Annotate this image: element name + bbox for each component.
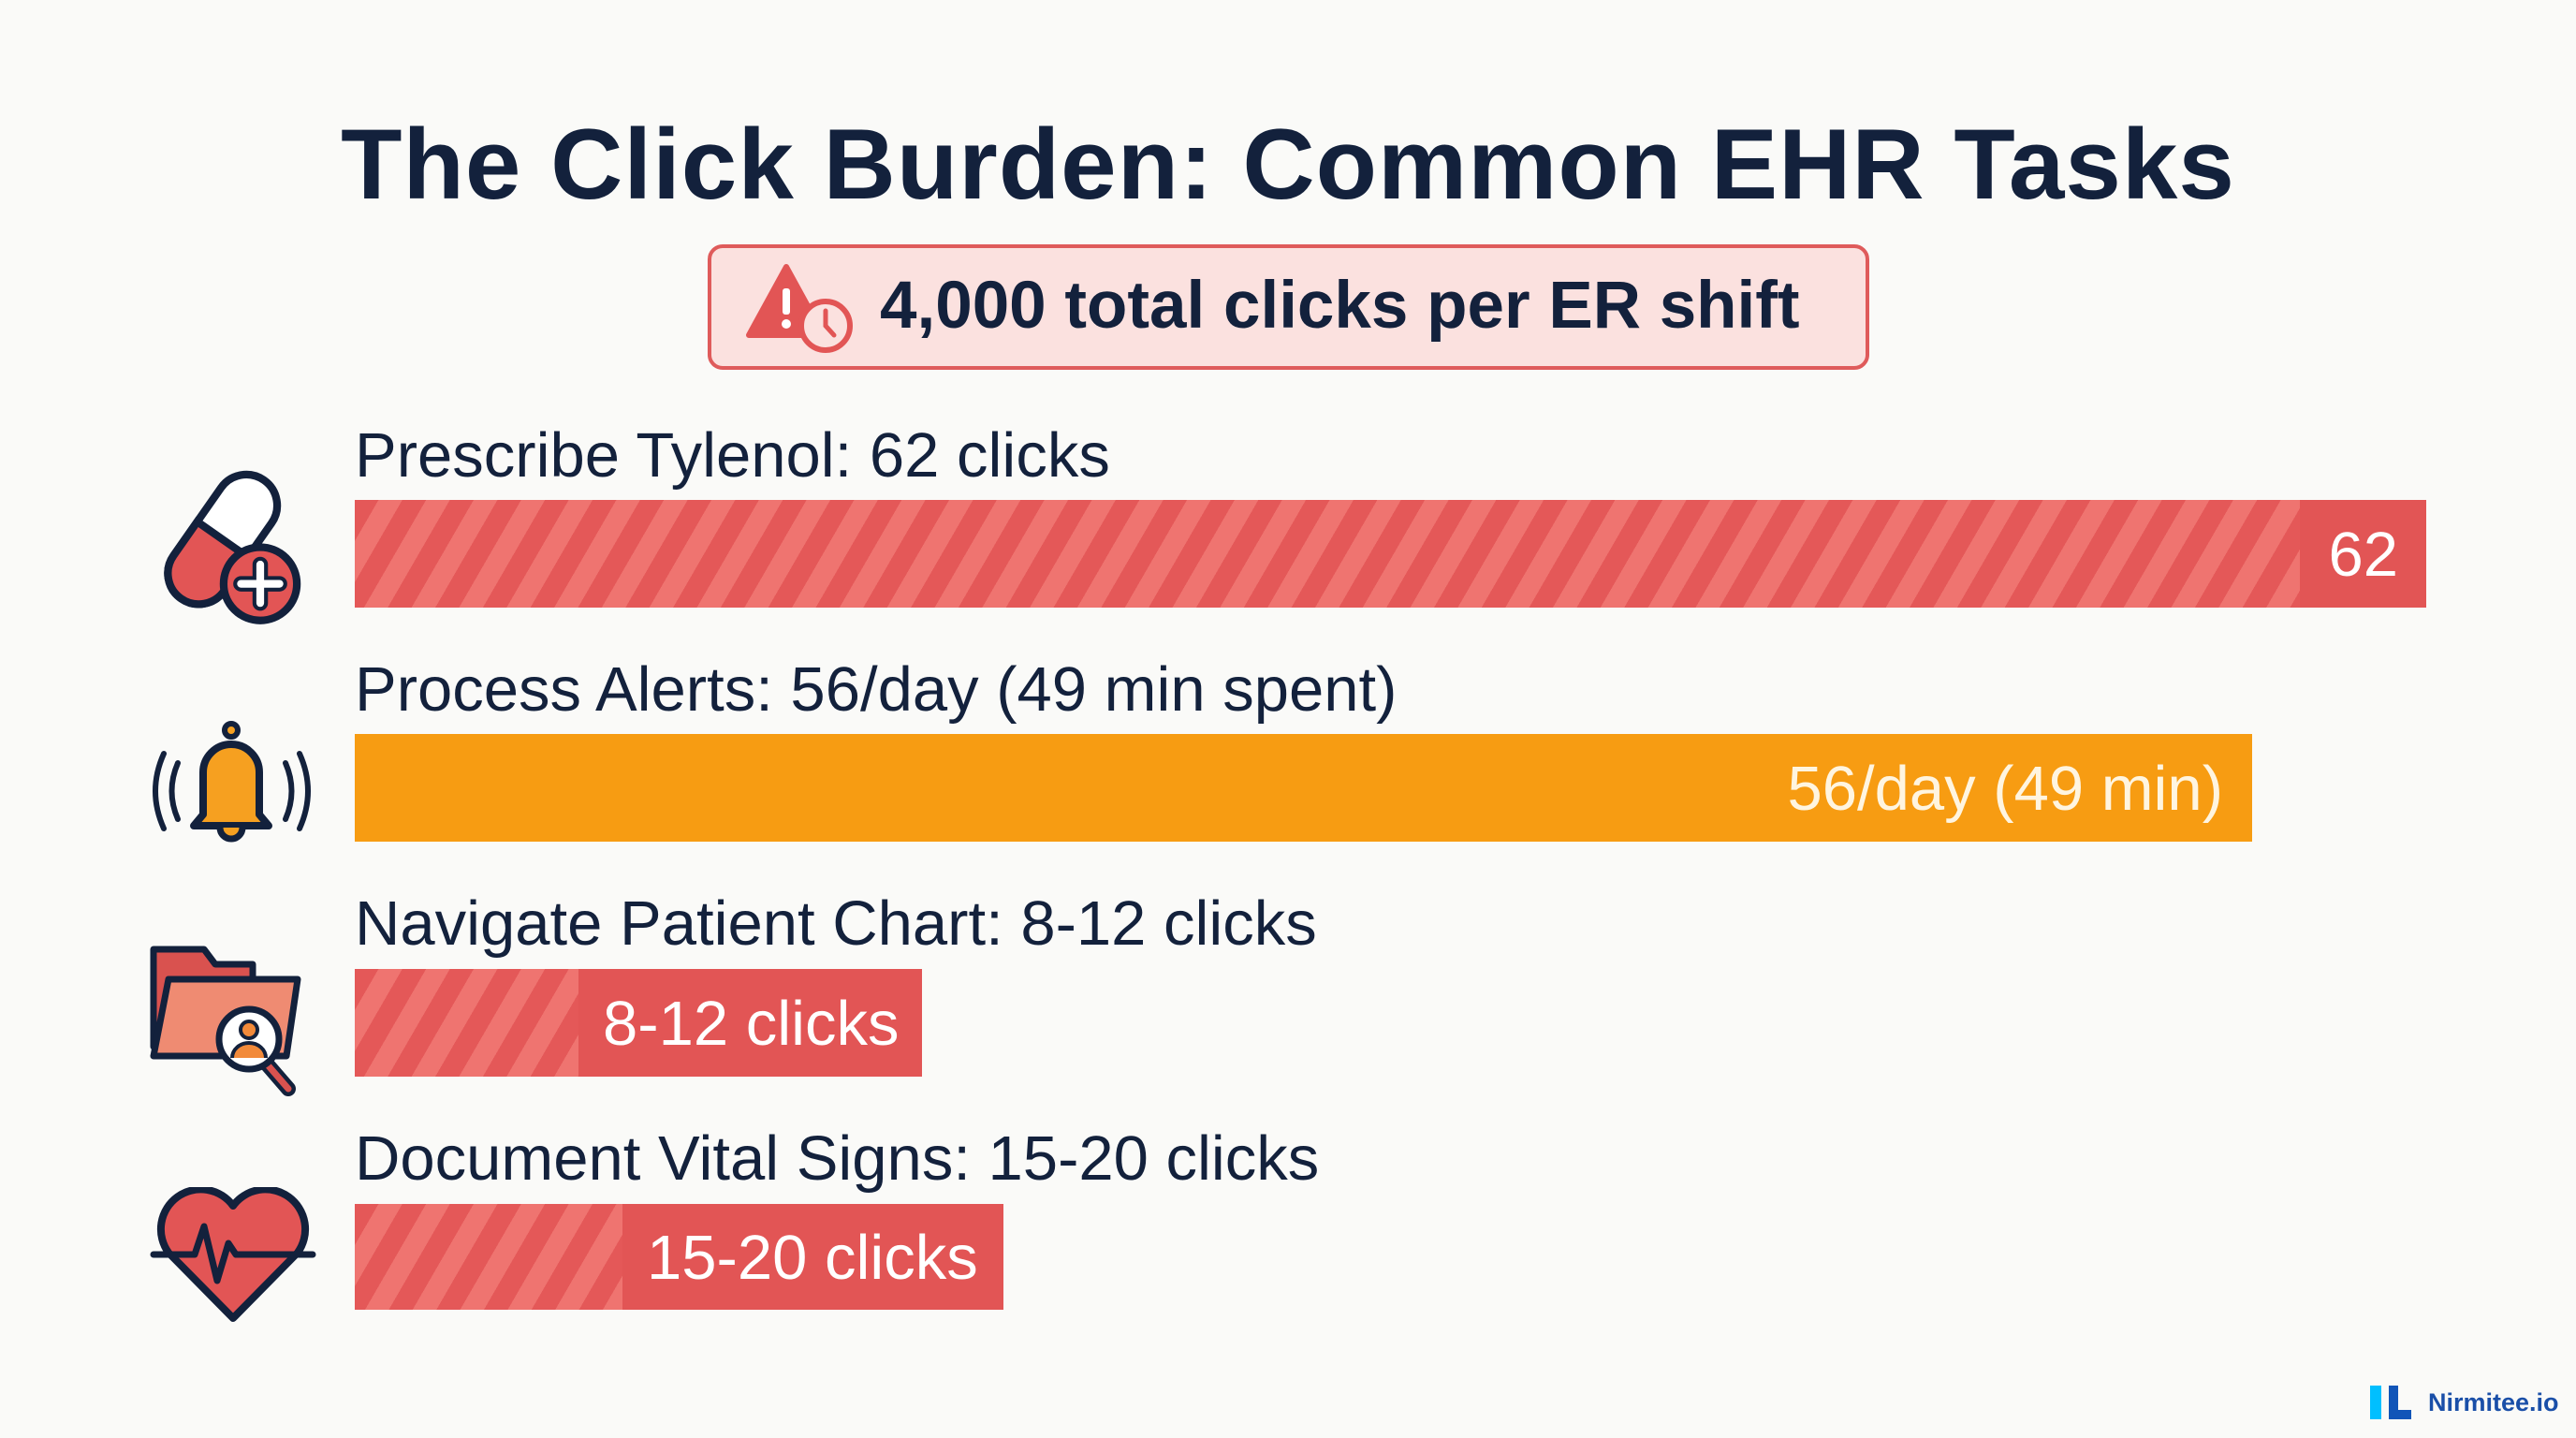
icon: folder search (150, 946, 301, 1096)
bar 4 (355, 1204, 1003, 1310)
bar 1 (355, 500, 2426, 608)
callout: total clicks (708, 244, 1869, 370)
bar 2 (355, 734, 2252, 842)
icon: logo mark (2370, 1386, 2411, 1419)
bar 1 value: 62 (2328, 520, 2398, 590)
logo (2370, 1386, 2559, 1419)
bar 2 value: 56/day (49 min) (1788, 754, 2223, 824)
title: The Click Burden: Common EHR Tasks (341, 108, 2235, 220)
bar 3 value: 8-12 clicks (603, 989, 899, 1059)
row 3 label: Navigate Patient Chart: 8-12 clicks (355, 888, 1317, 959)
icon: pill (164, 470, 301, 624)
bar 3 (355, 969, 922, 1077)
row 4 label: Document Vital Signs: 15-20 clicks (355, 1123, 1319, 1194)
icon: warning with clock (746, 264, 853, 353)
icon: bell (153, 721, 311, 843)
row 1 label: Prescribe Tylenol: 62 clicks (355, 420, 1110, 491)
row 2 label: Process Alerts: 56/day (49 min spent) (355, 654, 1397, 725)
logo text: Nirmitee.io (2428, 1388, 2559, 1416)
bar 4 value: 15-20 clicks (647, 1223, 978, 1293)
callout text: 4,000 total clicks per ER shift (880, 269, 1800, 343)
icon: heart pulse (150, 1187, 316, 1322)
